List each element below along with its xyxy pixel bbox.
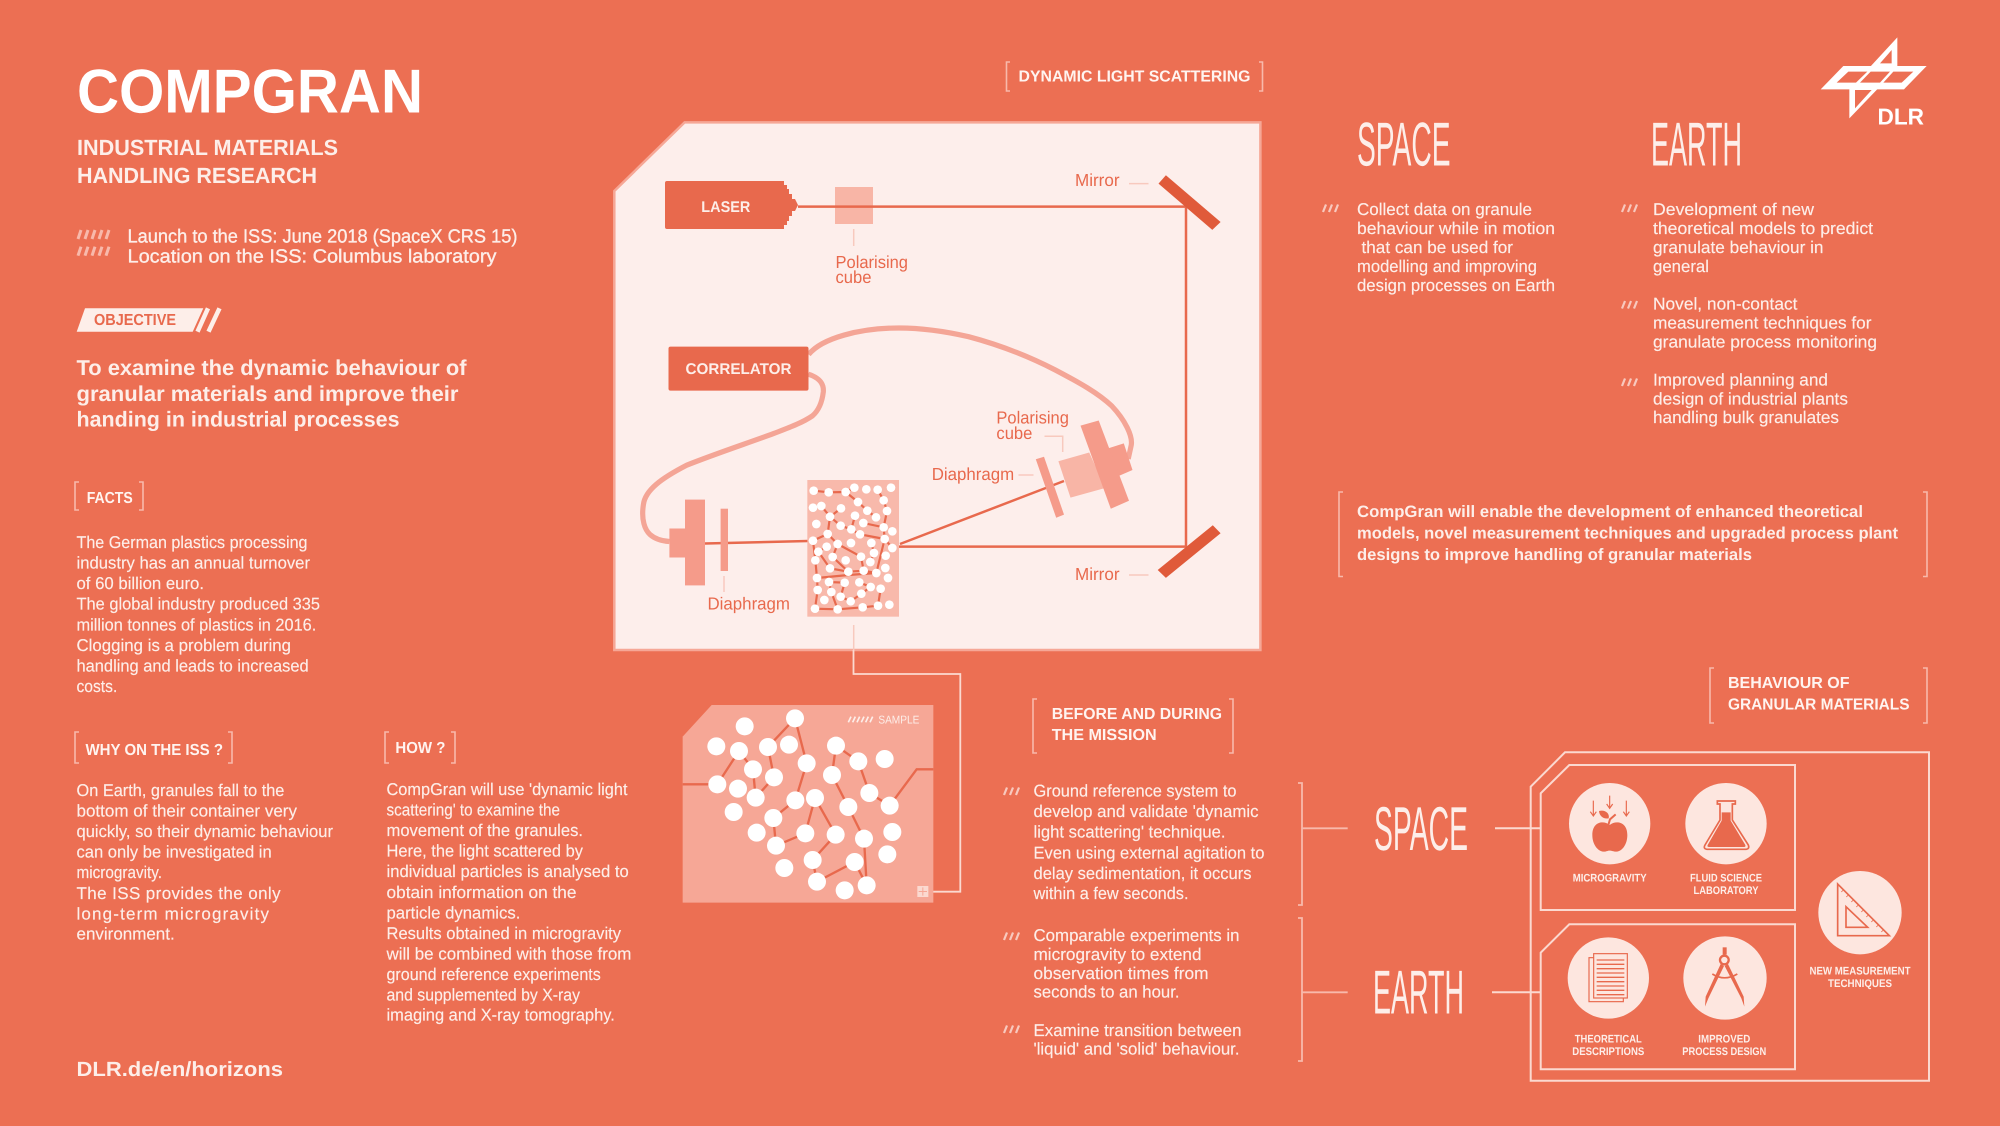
objective text: handing in industrial processes	[76, 408, 400, 432]
mirror: top: Mirror	[1075, 170, 1120, 190]
earth benefits list	[1622, 200, 1877, 427]
connector from sample to magnified view	[854, 650, 960, 892]
laser: LASER	[701, 199, 750, 216]
heading: behaviour of granular materials: GRANULAR MATERIALS	[1728, 696, 1910, 714]
mission text list: Even using external agitation to	[1034, 843, 1264, 862]
earth benefits list: design of industrial plants	[1653, 390, 1848, 408]
heading: behaviour of granular materials: BEHAVIOUR OF	[1728, 675, 1850, 692]
icon: DLR logo: DLR	[1878, 103, 1924, 129]
detector and diaphragm: left: Diaphragm	[708, 594, 790, 614]
label: new measurement techniques: NEW MEASUREMENT	[1810, 965, 1911, 977]
mirror: bottom	[1075, 525, 1221, 584]
detector and diaphragm: left	[669, 500, 790, 614]
how text: particle dynamics.	[386, 904, 520, 922]
how text: Here, the light scattered by	[386, 842, 583, 860]
why on the ISS text: microgravity.	[76, 863, 162, 882]
icon: documents	[1568, 937, 1649, 1019]
label: new measurement techniques: TECHNIQUES	[1828, 978, 1892, 990]
how text: individual particles is analysed to	[386, 862, 629, 881]
mission text list: Comparable experiments in	[1034, 926, 1240, 945]
why on the ISS text: The ISS provides the only	[76, 884, 281, 903]
heading: before and during the mission	[1033, 699, 1233, 753]
facts text: of 60 billion euro.	[76, 574, 204, 593]
icon: DLR logo	[1821, 37, 1927, 129]
mission text list: 'liquid' and 'solid' behaviour.	[1034, 1039, 1240, 1058]
how text: and supplemented by X-ray	[386, 986, 580, 1004]
earth benefits list: measurement techniques for	[1653, 314, 1872, 332]
laser	[665, 181, 798, 229]
correlator: CORRELATOR	[686, 361, 792, 378]
mirror: bottom: Mirror	[1075, 564, 1120, 584]
heading: how: HOW ?	[395, 740, 445, 757]
text: SPACE	[1374, 795, 1468, 864]
icon: compasses	[1683, 936, 1767, 1020]
mission text list	[1004, 782, 1264, 1058]
how text: scattering' to examine the	[386, 800, 560, 820]
correlator	[668, 347, 808, 391]
panel: behaviour frame	[1492, 752, 1929, 1081]
sample cell	[807, 480, 899, 617]
polarising cube	[835, 187, 908, 287]
polarising cube: cube	[836, 267, 872, 287]
conclusion callout: CompGran will enable the development of enhanced theoretical	[1357, 503, 1863, 521]
label: fluid science laboratory: LABORATORY	[1694, 885, 1759, 897]
text: EARTH	[1651, 111, 1742, 180]
how text: ground reference experiments	[386, 965, 601, 984]
earth benefits list: Development of new	[1653, 200, 1815, 219]
how text: Results obtained in microgravity	[386, 924, 621, 943]
label: improved process design: PROCESS DESIGN	[1682, 1046, 1766, 1058]
heading: dynamic light scattering: DYNAMIC LIGHT SCATTERING	[1018, 68, 1250, 86]
mirror: top	[1075, 170, 1221, 230]
detector and diaphragm: right: Polarising	[996, 408, 1069, 428]
label: theoretical descriptions: THEORETICAL	[1575, 1033, 1642, 1045]
facts text: handling and leads to increased	[76, 656, 309, 676]
mission text list: Examine transition between	[1034, 1021, 1242, 1040]
earth benefits list: granulate behaviour in	[1653, 238, 1824, 257]
sample label: SAMPLE	[878, 714, 919, 726]
objective tag: OBJECTIVE	[94, 312, 176, 329]
objective tag	[77, 308, 220, 332]
earth benefits list: Improved planning and	[1653, 370, 1828, 390]
why on the ISS text: On Earth, granules fall to the	[76, 781, 284, 800]
mission text list: develop and validate 'dynamic	[1034, 802, 1259, 821]
space benefits list: design processes on Earth	[1357, 276, 1555, 295]
how text: movement of the granules.	[386, 821, 583, 840]
why on the ISS text: long-term microgravity	[76, 904, 270, 924]
mission text list: seconds to an hour.	[1034, 983, 1180, 1002]
earth benefits list: theoretical models to predict	[1653, 219, 1873, 238]
panel: light scattering diagram	[614, 122, 1260, 650]
how text	[386, 780, 631, 1024]
facts text: The global industry produced 335	[76, 594, 320, 614]
icon: flask	[1685, 783, 1767, 864]
icon: apple under microgravity	[1569, 783, 1650, 864]
why on the ISS text: environment.	[76, 924, 175, 944]
mission text list: delay sedimentation, it occurs	[1034, 864, 1252, 883]
objective text	[76, 356, 467, 432]
why on the ISS text: can only be investigated in	[76, 842, 272, 862]
how text: obtain information on the	[386, 883, 576, 902]
launch and location details: Location on the ISS: Columbus laboratory	[128, 246, 497, 267]
why on the ISS text: quickly, so their dynamic behaviour	[76, 822, 333, 841]
label: improved process design	[1682, 1033, 1766, 1058]
subtitle: HANDLING RESEARCH	[77, 163, 317, 188]
label: theoretical descriptions	[1572, 1033, 1644, 1058]
heading: facts	[75, 482, 143, 510]
laser beam path	[705, 207, 1186, 547]
why on the ISS text	[76, 781, 333, 944]
heading: how	[385, 732, 455, 763]
objective text: To examine the dynamic behaviour of	[76, 356, 467, 380]
why on the ISS text: bottom of their container very	[76, 802, 297, 820]
title: COMPGRAN	[77, 58, 423, 127]
subtitle	[77, 135, 338, 188]
how text: will be combined with those from	[386, 944, 631, 964]
detector and diaphragm: right: cube	[996, 423, 1032, 443]
bracket to space	[1298, 783, 1348, 905]
mission text list: observation times from	[1034, 964, 1208, 983]
heading: facts: FACTS	[87, 490, 133, 507]
mission text list: microgravity to extend	[1034, 945, 1202, 964]
label: fluid science laboratory: FLUID SCIENCE	[1690, 873, 1762, 885]
earth benefits list: Novel, non-contact	[1653, 294, 1798, 314]
label: microgravity: MICROGRAVITY	[1573, 873, 1647, 885]
earth benefits list: handling bulk granulates	[1653, 408, 1839, 427]
facts text	[76, 533, 320, 696]
optical fibre cables	[643, 328, 1131, 542]
heading: before and during the mission: BEFORE AND DURING	[1052, 706, 1222, 723]
mission text list: within a few seconds.	[1033, 884, 1188, 903]
facts text: million tonnes of plastics in 2016.	[76, 616, 316, 634]
sample label	[848, 714, 919, 726]
label: theoretical descriptions: DESCRIPTIONS	[1572, 1046, 1644, 1058]
heading: before and during the mission: THE MISSION	[1052, 727, 1157, 744]
conclusion callout: designs to improve handling of granular materials	[1357, 546, 1752, 564]
conclusion callout: models, novel measurement techniques and upgraded process plant	[1357, 524, 1899, 542]
icon: set square	[1818, 871, 1902, 954]
label: improved process design: IMPROVED	[1698, 1033, 1750, 1045]
bracket to earth	[1298, 918, 1348, 1061]
heading: dynamic light scattering	[1006, 62, 1262, 91]
website link: DLR.de/en/horizons	[76, 1058, 283, 1081]
mission text list: Ground reference system to	[1034, 782, 1236, 801]
mission text list: light scattering' technique.	[1034, 823, 1226, 842]
space benefits list: that can be used for	[1362, 238, 1513, 257]
heading: why on the ISS	[75, 732, 232, 763]
label: new measurement techniques	[1810, 965, 1911, 990]
facts text: industry has an annual turnover	[76, 554, 310, 572]
space benefits list: Collect data on granule	[1357, 200, 1532, 219]
launch and location details: Launch to the ISS: June 2018 (SpaceX CRS 15)	[128, 226, 518, 247]
earth benefits list: general	[1653, 257, 1709, 276]
heading: why on the ISS: WHY ON THE ISS ?	[86, 742, 223, 759]
detector and diaphragm: right	[932, 408, 1132, 518]
space benefits list	[1323, 200, 1555, 295]
label: fluid science laboratory	[1690, 873, 1762, 897]
panel: earth outcomes	[1541, 924, 1795, 1069]
space benefits list: behaviour while in motion	[1357, 219, 1555, 238]
objective text: granular materials and improve their	[76, 382, 459, 406]
launch and location details	[78, 226, 518, 267]
facts text: costs.	[76, 677, 117, 696]
heading: behaviour of granular materials	[1710, 668, 1927, 723]
space benefits list: modelling and improving	[1357, 257, 1537, 276]
earth benefits list: granulate process monitoring	[1653, 332, 1877, 352]
facts text: The German plastics processing	[76, 533, 308, 552]
text: EARTH	[1373, 958, 1464, 1027]
how text: CompGran will use 'dynamic light	[386, 780, 628, 799]
conclusion callout	[1339, 492, 1927, 576]
subtitle: INDUSTRIAL MATERIALS	[77, 135, 338, 160]
text: SPACE	[1357, 111, 1450, 180]
how text: imaging and X-ray tomography.	[386, 1006, 615, 1024]
facts text: Clogging is a problem during	[76, 636, 291, 655]
panel: magnified sample	[683, 705, 933, 903]
detector and diaphragm: right: Diaphragm	[932, 464, 1014, 484]
polarising cube: Polarising	[836, 252, 908, 272]
panel: space outcomes	[1541, 765, 1795, 910]
